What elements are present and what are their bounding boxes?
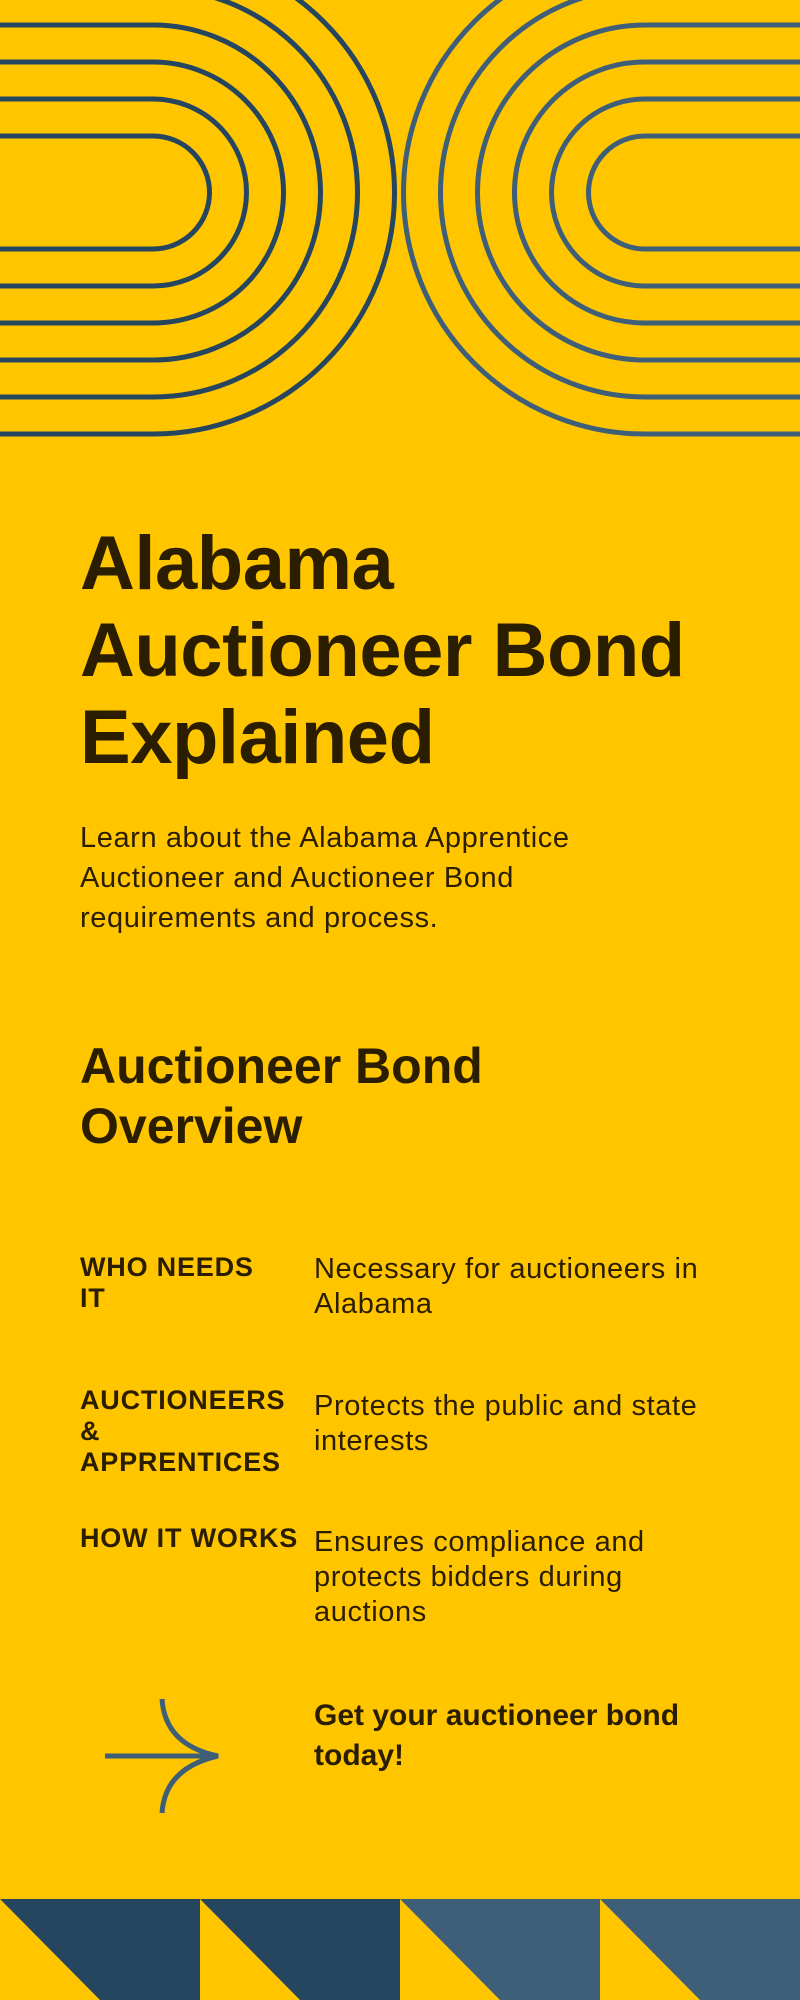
row text: protects [314, 1390, 697, 1457]
call to action: Get your auctioneer bond [314, 1699, 679, 1732]
row label: who needs it: IT [80, 1283, 106, 1313]
row text: how it works: protects bidders during [314, 1561, 623, 1593]
row label: auctioneers & apprentices: APPRENTICES [80, 1447, 281, 1477]
title [80, 521, 685, 780]
row text: who needs it: Alabama [314, 1288, 433, 1320]
row label: auctioneers & apprentices: AUCTIONEERS [80, 1385, 285, 1415]
row label: how it works: HOW IT WORKS [80, 1523, 298, 1553]
row text: how it works: auctions [314, 1596, 427, 1628]
row text: protects: interests [314, 1425, 429, 1457]
section heading [80, 1038, 483, 1154]
row label: auctioneers & apprentices [80, 1385, 285, 1477]
subtitle: Auctioneer and Auctioneer Bond [80, 862, 514, 894]
section heading: Overview [80, 1098, 302, 1154]
row text: how it works [314, 1526, 645, 1628]
title: Explained [80, 695, 434, 780]
decorative arcs header [0, 0, 800, 436]
call to action: today! [314, 1739, 404, 1772]
call to action [314, 1699, 679, 1772]
row text: protects: Protects the public and state [314, 1390, 697, 1422]
subtitle [80, 822, 570, 934]
row label: who needs it: WHO NEEDS [80, 1252, 254, 1282]
subtitle: Learn about the Alabama Apprentice [80, 822, 570, 854]
row text: who needs it [314, 1253, 698, 1320]
row text: how it works: Ensures compliance and [314, 1526, 645, 1558]
title: Auctioneer Bond [80, 608, 685, 693]
row text: who needs it: Necessary for auctioneers in [314, 1253, 698, 1285]
row label: auctioneers & apprentices: & [80, 1416, 100, 1446]
section heading: Auctioneer Bond [80, 1038, 483, 1094]
row label: who needs it [80, 1252, 254, 1313]
icon: arrow [105, 1698, 219, 1814]
title: Alabama [80, 521, 393, 606]
footer triangles [0, 1899, 800, 2000]
subtitle: requirements and process. [80, 902, 438, 934]
